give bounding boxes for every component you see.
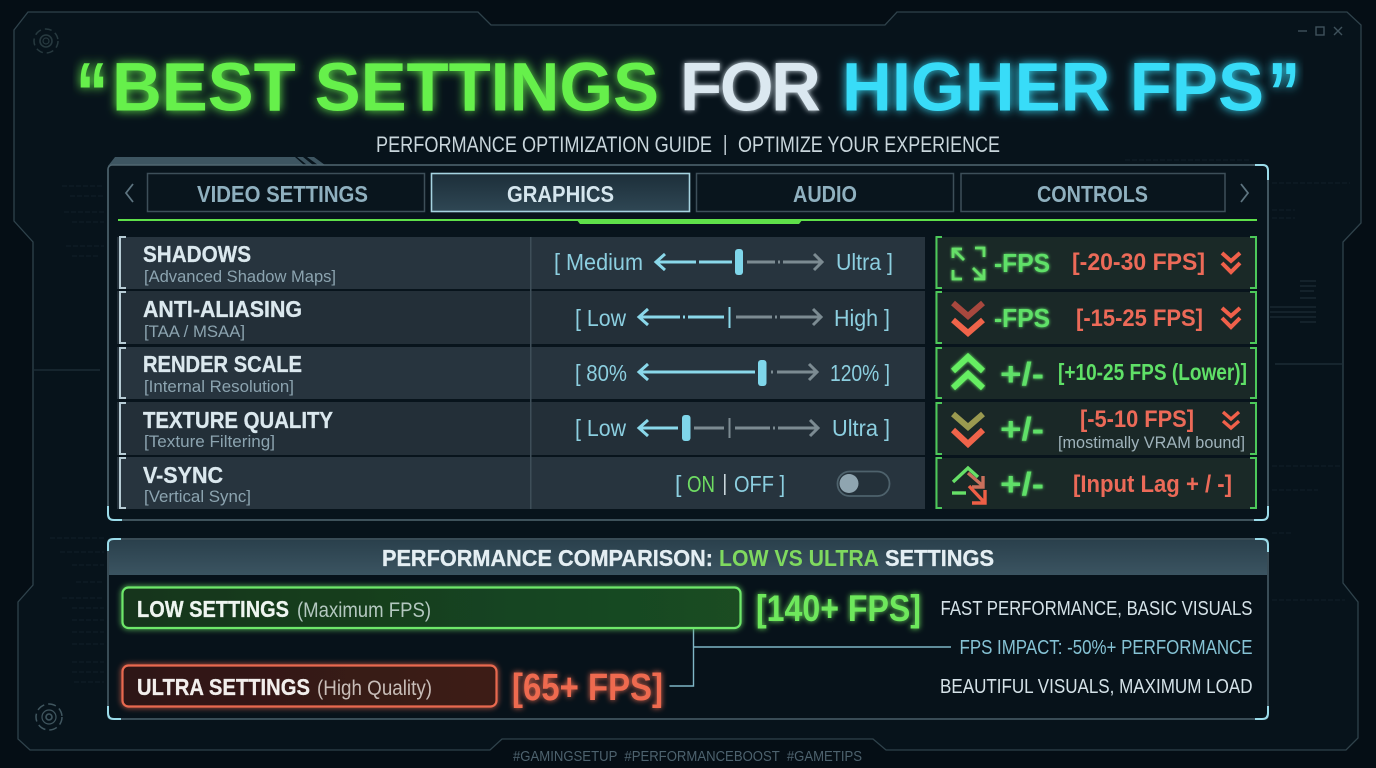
subtitle [376, 132, 1000, 157]
low settings bar: LOW SETTINGS [137, 596, 289, 622]
tab bar: AUDIO [793, 181, 857, 207]
tab bar: CONTROLS [1037, 181, 1148, 207]
ultra settings bar [122, 666, 496, 706]
title: ” [1268, 46, 1300, 141]
connector lines [670, 628, 951, 686]
comparison heading: SETTINGS [885, 545, 994, 571]
row: v-sync: ON [687, 471, 715, 497]
window controls [1298, 27, 1342, 35]
fps impact note: FPS IMPACT: -50%+ PERFORMANCE [960, 637, 1252, 659]
row: render scale: [ 80% [575, 360, 627, 386]
row: render scale [143, 351, 890, 396]
impact cells background [935, 237, 1257, 509]
impact: anti-aliasing: [-15-25 FPS] [1076, 305, 1203, 332]
impact: render scale [953, 356, 1247, 392]
tab bar: VIDEO SETTINGS [197, 181, 368, 207]
low description: FAST PERFORMANCE, BASIC VISUALS [940, 598, 1252, 620]
row: render scale: RENDER SCALE [143, 351, 302, 377]
comparison heading: LOW VS ULTRA [719, 545, 879, 571]
row: anti-aliasing: ANTI-ALIASING [143, 296, 302, 322]
row: texture quality: [Texture Filtering] [144, 432, 275, 451]
low settings bar [122, 588, 740, 628]
row: texture quality: Ultra ] [832, 415, 890, 441]
title: FOR [680, 48, 821, 126]
impact: render scale: [+10-25 FPS (Lower)] [1058, 359, 1247, 385]
impact: v-sync: +/- [1000, 466, 1044, 502]
comparison heading: PERFORMANCE COMPARISON: [382, 545, 713, 571]
impact: texture quality: [mostimally VRAM bound] [1058, 433, 1245, 452]
ultra description: BEAUTIFUL VISUALS, MAXIMUM LOAD [940, 676, 1252, 698]
row: v-sync: OFF ] [734, 471, 785, 497]
icon: mixed arrows [952, 468, 985, 503]
icon: bottom-left emblem [36, 704, 62, 730]
ultra fps value: [65+ FPS] [512, 667, 663, 709]
tab bar [118, 174, 1257, 224]
row backgrounds [117, 237, 925, 509]
row: shadows: [ Medium [554, 249, 643, 275]
panel: performance comparison [108, 539, 1268, 719]
title [76, 46, 1300, 141]
comparison heading [382, 545, 994, 571]
subtitle: OPTIMIZE YOUR EXPERIENCE [738, 132, 1000, 157]
row: anti-aliasing: High ] [834, 305, 890, 331]
row: render scale: 120% ] [830, 360, 890, 386]
row: shadows: [Advanced Shadow Maps] [144, 267, 336, 286]
icon: double chevron up [953, 357, 983, 388]
impact: render scale: +/- [1000, 356, 1044, 392]
icon: chevrons olive and red [953, 414, 983, 444]
impact: shadows [953, 248, 1240, 279]
impact: v-sync: [Input Lag + / -] [1073, 471, 1232, 498]
row: anti-aliasing: [TAA / MSAA] [144, 322, 245, 341]
icon: double chevron down [953, 303, 983, 333]
icon: top-left emblem [34, 29, 58, 53]
row: texture quality [143, 407, 890, 451]
row: shadows: SHADOWS [143, 241, 251, 267]
ultra settings bar: ULTRA SETTINGS [137, 674, 310, 700]
row: anti-aliasing: [ Low [575, 305, 626, 331]
panel: settings [108, 157, 1268, 520]
row: v-sync: [ [675, 471, 682, 497]
impact: texture quality: +/- [1000, 411, 1044, 447]
row: texture quality: [ Low [575, 415, 626, 441]
impact: v-sync [952, 466, 1232, 503]
row: texture quality: TEXTURE QUALITY [143, 407, 333, 433]
impact: anti-aliasing: -FPS [994, 303, 1050, 333]
title: BEST SETTINGS [112, 48, 659, 126]
title: “ [76, 46, 108, 141]
impact: anti-aliasing [953, 303, 1240, 333]
low settings bar: (Maximum FPS) [297, 599, 431, 622]
row: shadows: Ultra ] [836, 249, 893, 275]
ultra settings bar: (High Quality) [317, 677, 432, 700]
low fps value: [140+ FPS] [756, 588, 921, 629]
row: v-sync [143, 462, 890, 506]
row: anti-aliasing [143, 296, 890, 341]
impact: texture quality [953, 406, 1245, 452]
impact: shadows: [-20-30 FPS] [1072, 249, 1205, 276]
row: v-sync: V-SYNC [143, 462, 223, 488]
hashtags footer: #GAMINGSETUP #PERFORMANCEBOOST #GAMETIPS [513, 748, 862, 765]
subtitle: PERFORMANCE OPTIMIZATION GUIDE [376, 132, 712, 157]
impact: texture quality: [-5-10 FPS] [1080, 406, 1194, 433]
row: v-sync: [Vertical Sync] [144, 487, 251, 506]
impact: shadows: -FPS [994, 248, 1050, 278]
row: shadows [143, 241, 893, 286]
tab bar: GRAPHICS [507, 181, 614, 207]
row: render scale: [Internal Resolution] [144, 377, 294, 396]
title: HIGHER FPS [842, 48, 1264, 126]
icon: expand arrows [953, 248, 984, 279]
